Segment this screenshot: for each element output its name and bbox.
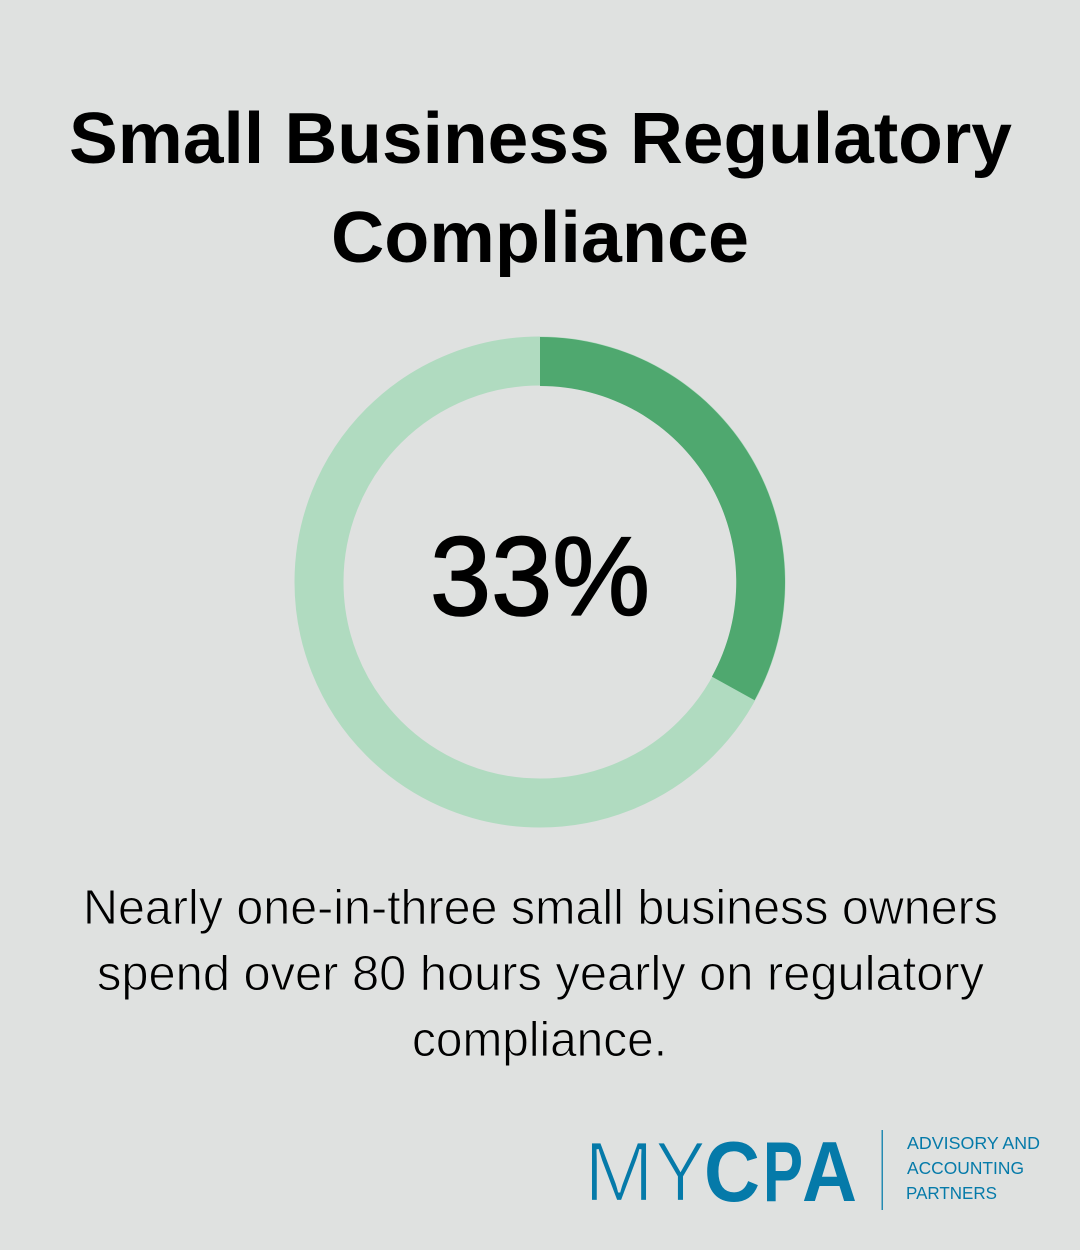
logo tagline: ACCOUNTING	[907, 1158, 1024, 1178]
logo tagline	[906, 1133, 1040, 1203]
description text: Nearly one-in-three small business owners	[83, 881, 998, 935]
title: Small Business Regulatory	[69, 99, 1012, 179]
title	[69, 99, 1012, 278]
description text: compliance.	[412, 1013, 667, 1067]
logo wordmark	[584, 1125, 857, 1220]
logo wordmark: M	[584, 1125, 654, 1220]
description text	[83, 881, 998, 1067]
title: Compliance	[331, 198, 749, 278]
donut chart	[319, 337, 785, 803]
logo tagline: ADVISORY AND	[907, 1133, 1040, 1153]
percentage value: 33%	[430, 514, 650, 639]
logo wordmark: A	[802, 1125, 857, 1220]
logo: MyCPA	[584, 1125, 1040, 1220]
logo wordmark: Y	[655, 1125, 706, 1220]
logo wordmark: C	[704, 1125, 760, 1220]
logo tagline: PARTNERS	[906, 1183, 997, 1203]
logo wordmark: P	[763, 1125, 803, 1220]
donut segment: 33%	[540, 337, 785, 700]
description text: spend over 80 hours yearly on regulatory	[97, 947, 984, 1001]
